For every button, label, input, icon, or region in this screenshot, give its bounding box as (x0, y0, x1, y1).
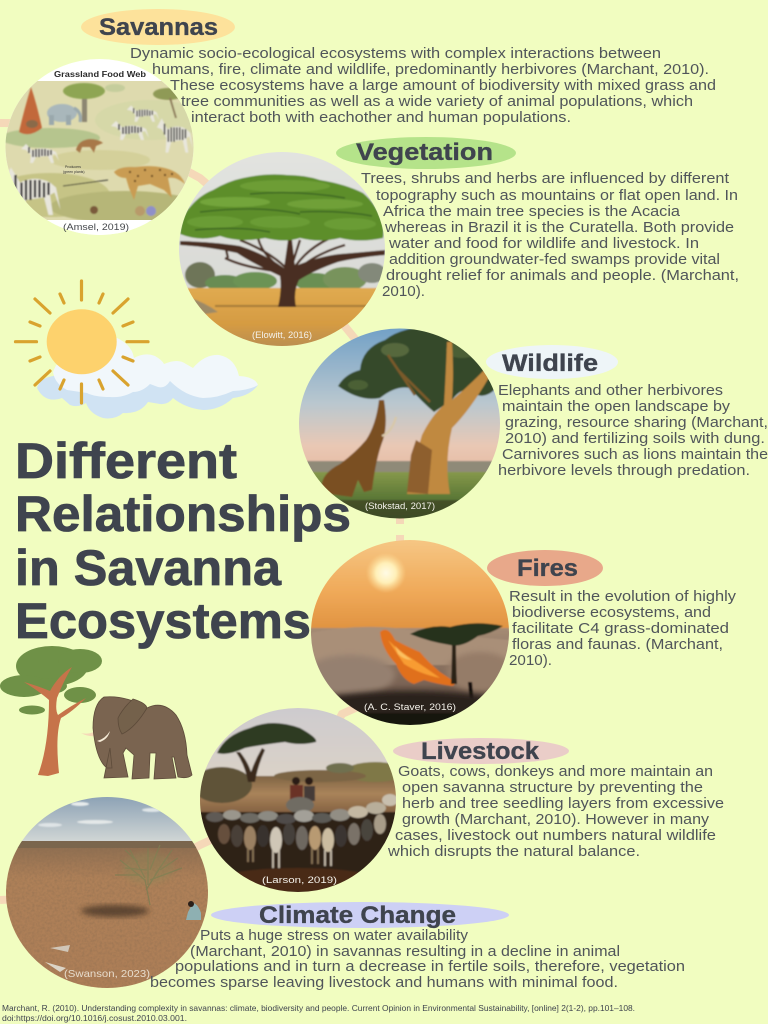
caption: (Swanson, 2023) (64, 968, 150, 980)
heading pill: Livestock (393, 738, 569, 765)
icon: sun (16, 281, 148, 403)
photo circle: dry cracked land (0, 795, 215, 991)
illustration: acacia tree (0, 646, 102, 776)
title: Ecosystems (15, 593, 311, 649)
text block: Livestock: cases, livestock out numbers natural wildlife (395, 828, 716, 844)
text block: Vegetation: drought relief for animals and people. (Marchant, (386, 268, 739, 284)
text block: Wildlife: maintain the open landscape by (502, 399, 731, 415)
food web label: Grassland Food Web (54, 70, 146, 79)
title (15, 433, 351, 649)
heading pill: Fires (487, 550, 603, 586)
illustration: elephant (81, 697, 192, 779)
heading pill: Climate Change: Climate Change (259, 902, 456, 929)
connector path linking the circles (0, 123, 400, 900)
heading pill: Wildlife (486, 345, 618, 379)
title: Different (15, 433, 237, 489)
text block: Livestock: open savanna structure by preventing the (402, 780, 703, 796)
text block: Savannas (130, 46, 716, 126)
text block: Wildlife: 2010) and fertilizing soils with dung. (505, 431, 765, 447)
photo circle: grassland food web (0, 59, 205, 236)
text block: Vegetation: addition groundwater-fed swamps provide vital (389, 252, 720, 268)
text block: Wildlife: Carnivores such as lions maintain the (502, 447, 768, 463)
caption: (Larson, 2019) (262, 875, 337, 885)
heading pill: Fires: Fires (517, 555, 578, 582)
text block: Fires: facilitate C4 grass-dominated (512, 621, 729, 637)
caption: (Stokstad, 2017) (365, 501, 435, 511)
text block: Livestock (387, 764, 724, 860)
text block: Climate Change (150, 928, 685, 991)
text block: Fires: 2010). (509, 653, 552, 669)
text block: Fires: biodiverse ecosystems, and (512, 605, 711, 621)
text block: Climate Change: Puts a huge stress on water availability (200, 928, 469, 944)
text block: Livestock: Goats, cows, donkeys and more maintain an (398, 764, 713, 780)
heading pill: Vegetation (336, 137, 516, 169)
heading pill: Livestock: Livestock (421, 738, 539, 765)
illustration: sun and cloud (16, 281, 258, 418)
text block: Climate Change: becomes sparse leaving livestock and humans with minimal food. (150, 975, 618, 991)
text block: Savannas: Dynamic socio-ecological ecosystems with complex interactions between (130, 46, 661, 62)
text block: Fires: Result in the evolution of highly (509, 589, 737, 605)
small map labels: Producers (65, 165, 81, 169)
text block: Livestock: growth (Marchant, 2010). However in many (402, 812, 710, 828)
text block: Livestock: which disrupts the natural balance. (387, 844, 640, 860)
text block: Vegetation: Africa the main tree species is the Acacia (383, 204, 680, 220)
heading pill: Vegetation: Vegetation (356, 139, 493, 166)
reference citation: Marchant, R. (2010). Understanding complexity in savannas: climate, biodiversity and people. Current Opinion in Environmental Sustainability, [online] 2(1-2), pp.101–108. (2, 1003, 635, 1013)
reference citation (2, 1003, 635, 1023)
text block: Wildlife (498, 383, 768, 479)
text block: Wildlife: Elephants and other herbivores (498, 383, 723, 399)
title: in Savanna (15, 540, 282, 596)
heading pill: Climate Change (211, 902, 509, 929)
text block: Vegetation: water and food for wildlife and livestock. In (388, 236, 699, 252)
text block: Vegetation: topography such as mountains or flat open land. In (376, 188, 738, 204)
photo circle: elephant reaching into tree (295, 325, 505, 522)
text block: Vegetation: Trees, shrubs and herbs are influenced by different (361, 171, 729, 187)
photo circle: acacia tree (170, 150, 390, 348)
caption: (Elowitt, 2016) (252, 330, 312, 340)
text block: Vegetation (361, 171, 739, 300)
reference citation: doi:https://doi.org/10.1016/j.cosust.2010.03.001. (2, 1013, 187, 1023)
text block: Savannas: interact both with eachother and human populations. (191, 110, 571, 126)
text block: Savannas: tree communities as well as a wide variety of animal populations, which (181, 94, 693, 110)
photo circle: grassland food web: (green plants) (63, 170, 85, 174)
heading pill: Savannas: Savannas (99, 14, 218, 41)
text block: Vegetation: 2010). (382, 284, 425, 300)
heading pill: Wildlife: Wildlife (502, 350, 598, 377)
text block: Savannas: These ecosystems have a large amount of biodiversity with mixed grass and (170, 78, 716, 94)
icon: cloud (37, 338, 258, 418)
text block: Climate Change: (Marchant, 2010) in savannas resulting in a decline in animal (190, 944, 620, 960)
caption: (A. C. Staver, 2016) (364, 702, 456, 712)
text block: Livestock: herb and tree seedling layers from excessive (402, 796, 724, 812)
text block: Wildlife: herbivore levels through predation. (498, 463, 750, 479)
text block: Savannas: humans, fire, climate and wildlife, predominantly herbivores (Marchant, 2010). (152, 62, 709, 78)
photo circle: savanna fire (305, 535, 515, 728)
text block: Fires (509, 589, 737, 669)
text block: Wildlife: grazing, resource sharing (Marchant, (505, 415, 768, 431)
caption: (Amsel, 2019) (63, 222, 129, 233)
photo circle: herders and cattle (200, 708, 396, 892)
heading pill: Savannas (81, 9, 235, 45)
text block: Fires: floras and faunas. (Marchant, (512, 637, 723, 653)
text block: Climate Change: populations and in turn a decrease in fertile soils, therefore, vegetation (175, 959, 685, 975)
title: Relationships (15, 486, 351, 542)
text block: Vegetation: whereas in Brazil it is the Curatella. Both provide (384, 220, 734, 236)
